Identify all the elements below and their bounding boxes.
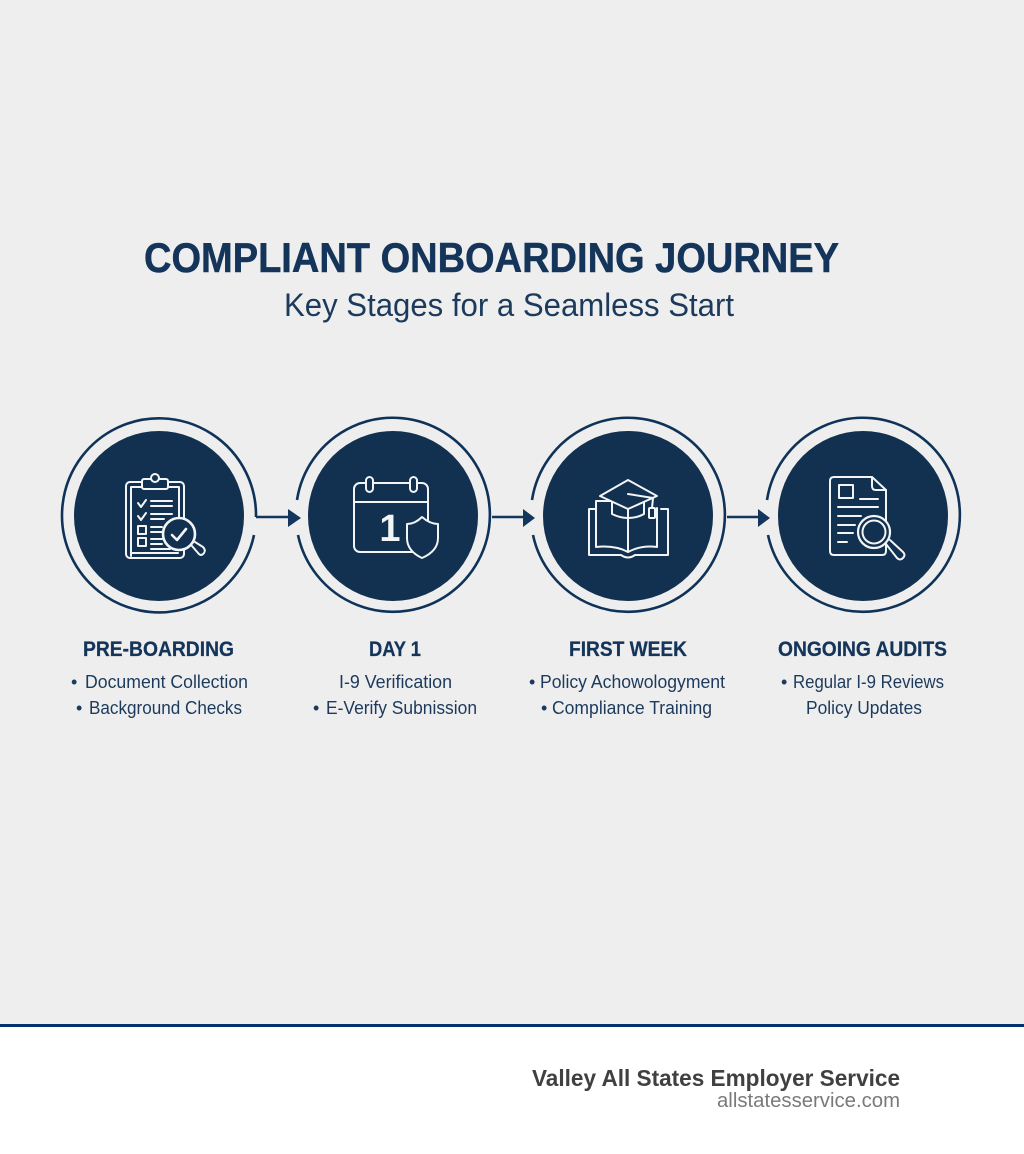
bullets: •: [781, 672, 787, 692]
footer band: [0, 1024, 1024, 1154]
stage 2: day 1: [297, 418, 535, 718]
bullets: [71, 672, 248, 718]
bullets: Compliance Training: [552, 698, 712, 718]
bullets: Policy Updates: [806, 698, 922, 718]
icon: calendar with shield: [354, 477, 438, 558]
bullets: •: [541, 698, 547, 718]
navy disc: [308, 431, 478, 601]
ring and connector arrow: [62, 418, 301, 612]
bullets: Policy Achowologyment: [540, 672, 725, 692]
footer company name: Valley All States Employer Service: [532, 1065, 900, 1091]
subtitle: Key Stages for a Seamless Start: [284, 287, 734, 323]
navy disc: [543, 431, 713, 601]
navy disc: [778, 431, 948, 601]
bullets: E-Verify Subnission: [326, 698, 477, 718]
calendar numeral: 1: [379, 508, 401, 550]
bullets: •: [529, 672, 535, 692]
heading: PRE-BOARDING: [83, 638, 234, 661]
heading: FIRST WEEK: [569, 638, 687, 661]
bullets: I-9 Verification: [339, 672, 452, 692]
stage 1: pre-boarding: [62, 418, 301, 718]
heading: ONGOING AUDITS: [778, 638, 947, 661]
bullets: Regular I-9 Reviews: [793, 672, 944, 692]
heading: DAY 1: [369, 638, 421, 661]
stage 4: ongoing audits: [767, 418, 960, 718]
icon: document with magnifier: [830, 477, 904, 560]
bullets: •: [76, 698, 82, 718]
stage 3: first week: [529, 418, 770, 718]
title: COMPLIANT ONBOARDING JOURNEY: [144, 234, 839, 281]
icon: open book with graduation cap: [589, 480, 668, 558]
ring and connector arrow: [297, 418, 535, 612]
bullets: Background Checks: [89, 698, 242, 718]
bullets: Document Collection: [85, 672, 248, 692]
ring and connector arrow: [532, 418, 770, 612]
bullets: •: [313, 698, 319, 718]
ring: [767, 418, 960, 612]
navy disc: [74, 431, 244, 601]
bullets: [313, 672, 477, 718]
bullets: •: [71, 672, 77, 692]
bullets: [781, 672, 944, 718]
footer website: allstatesservice.com: [717, 1090, 900, 1112]
icon: clipboard checklist with magnifier: [126, 474, 205, 558]
bullets: [529, 672, 725, 718]
